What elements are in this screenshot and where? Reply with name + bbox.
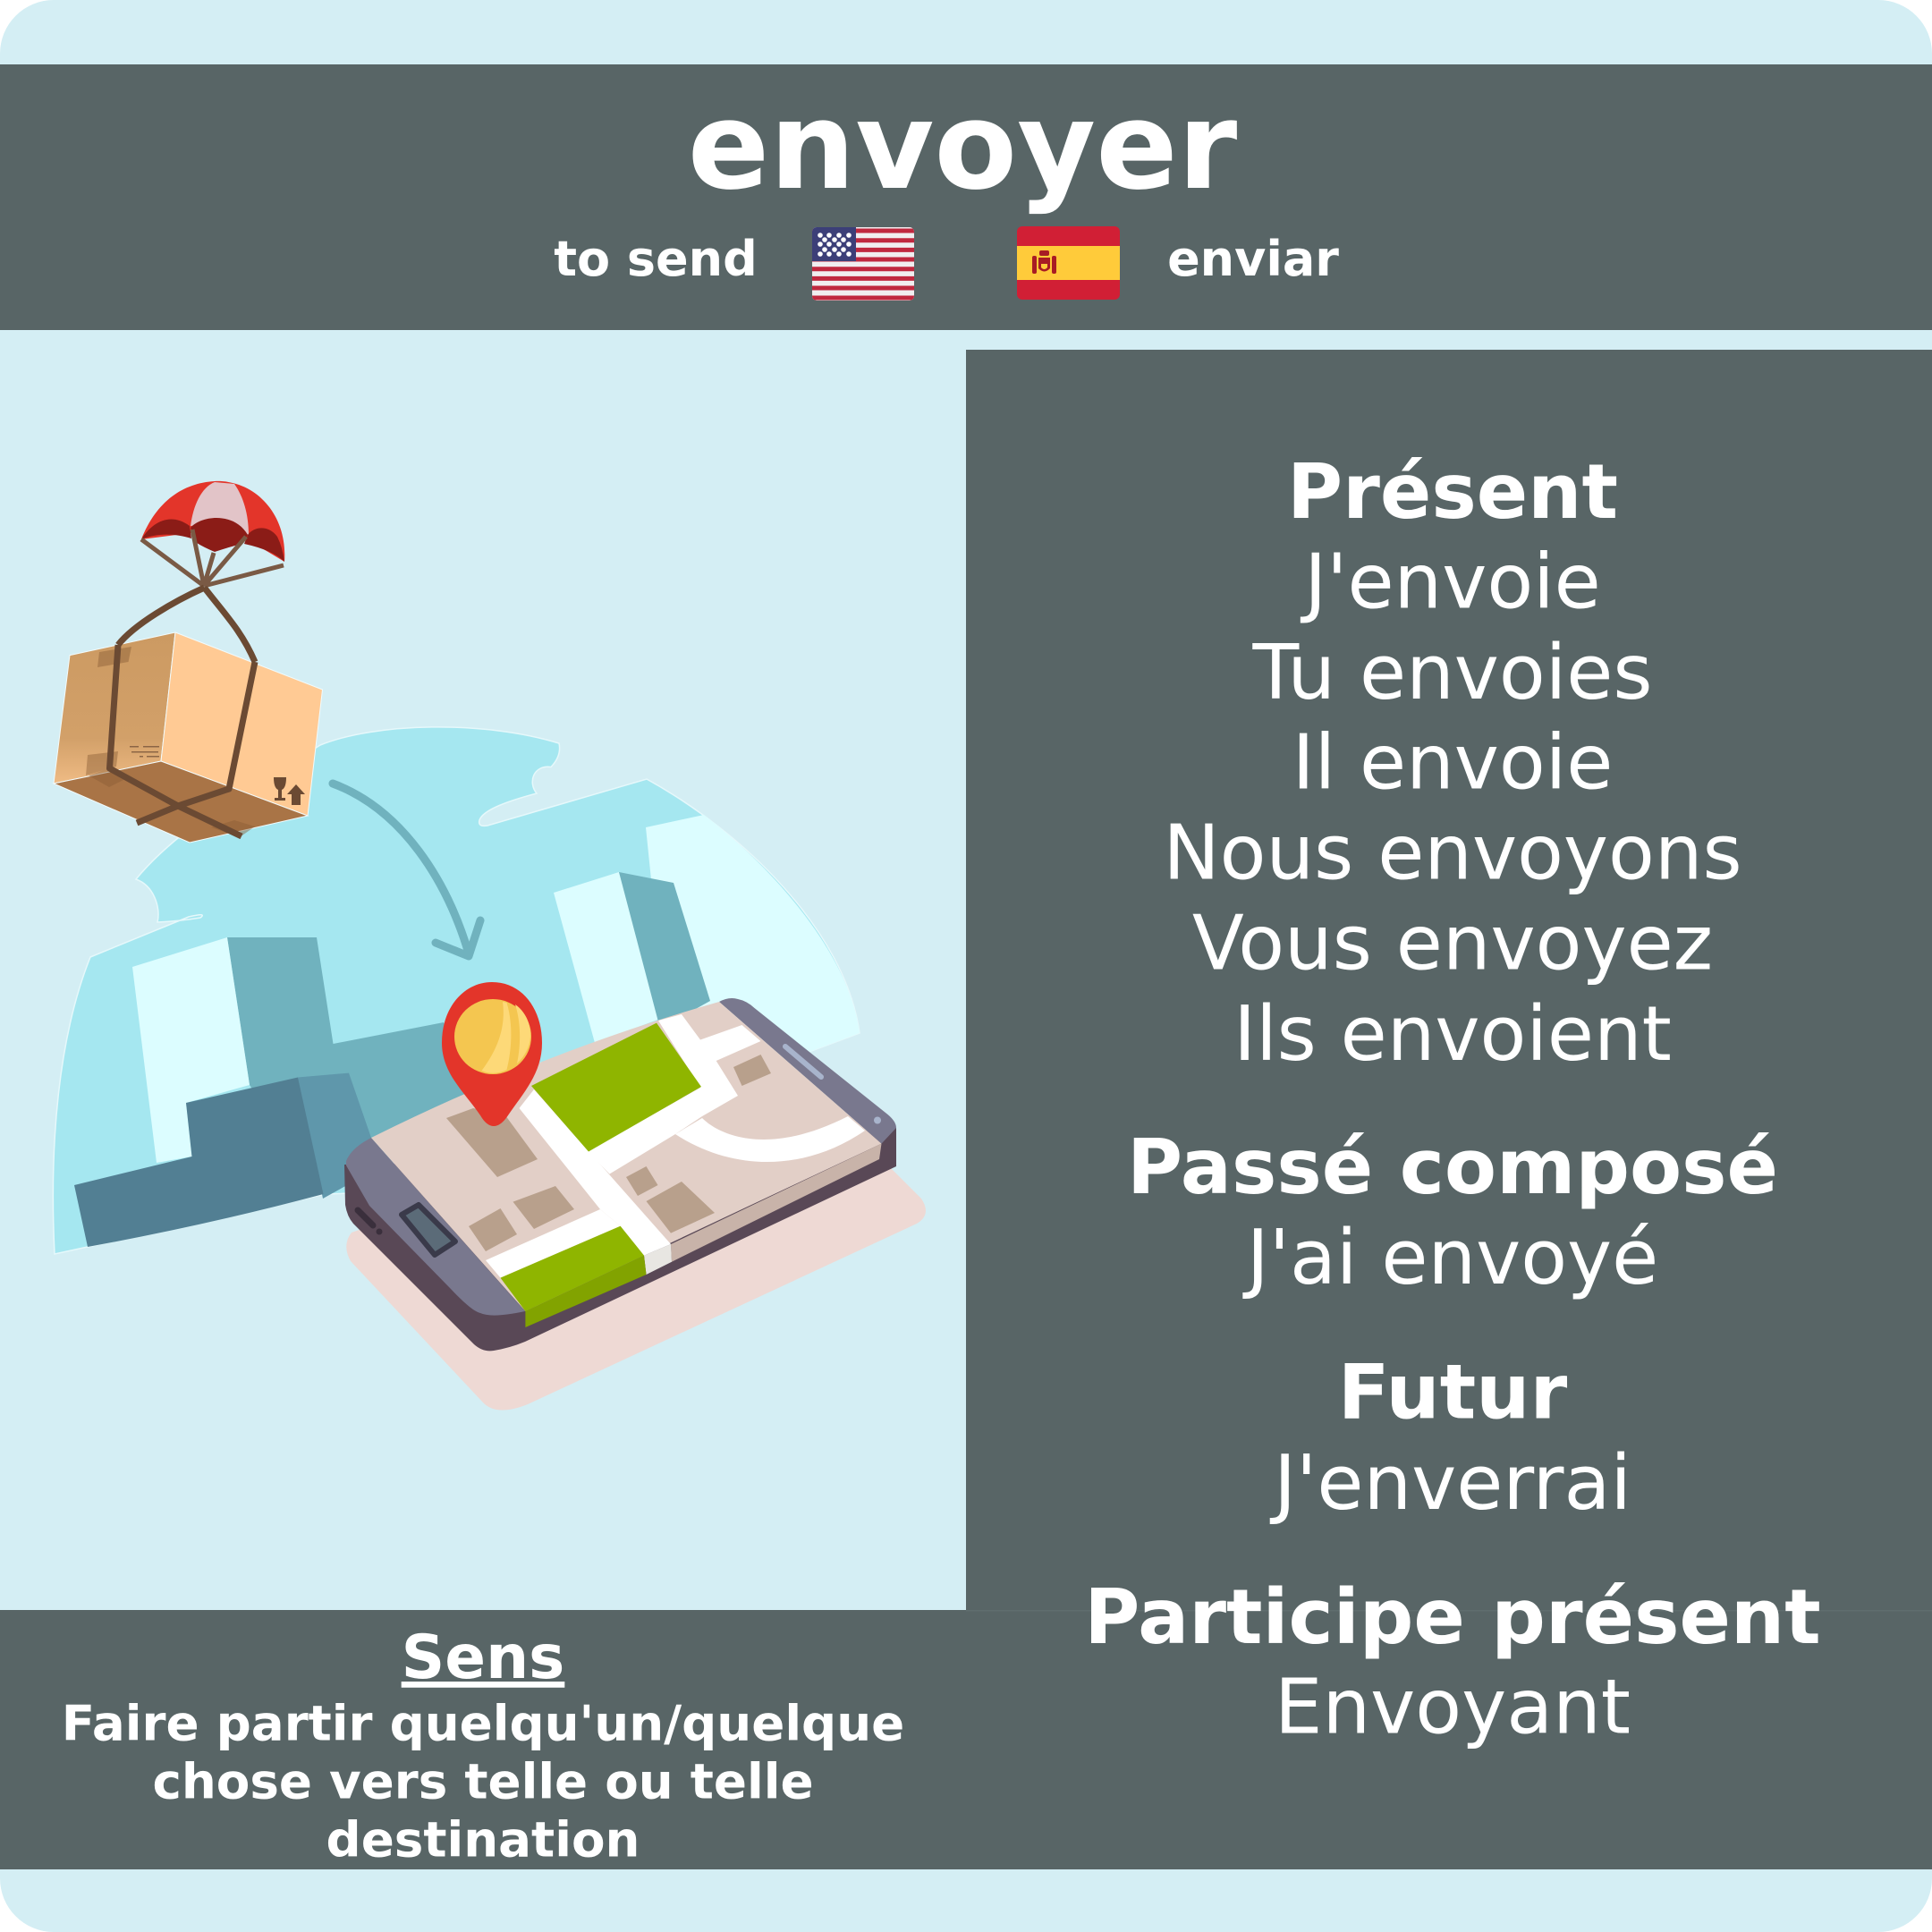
spanish translation: enviar (1167, 231, 1339, 287)
present tense: Tu envoies (1252, 628, 1652, 716)
middle building (554, 872, 710, 1043)
present tense (1163, 447, 1742, 1078)
present tense: Il envoie (1292, 717, 1613, 807)
participe present: Envoyant (1275, 1662, 1631, 1751)
meaning text: Faire partir quelqu'un/quelque (62, 1694, 904, 1751)
box markings (130, 746, 305, 805)
passe compose (1127, 1123, 1778, 1301)
header band (0, 64, 1932, 330)
arrow (333, 784, 480, 956)
box (54, 632, 322, 843)
straps (109, 588, 255, 836)
left building (132, 937, 464, 1163)
participe present: Participe présent (1084, 1572, 1821, 1661)
parcel with parachute (54, 481, 322, 843)
phone shadow (346, 1163, 926, 1411)
map roads (486, 1014, 865, 1278)
present tense: Ils envoient (1233, 989, 1672, 1078)
title: envoyer (688, 76, 1238, 216)
parachute (141, 481, 284, 586)
meaning text: chose vers telle ou telle (152, 1753, 814, 1810)
meaning heading: Sens (402, 1622, 564, 1692)
location pin (442, 982, 542, 1126)
panel: meaning (0, 1610, 966, 1869)
phone (344, 998, 896, 1351)
map parks (501, 1023, 701, 1327)
light building right (646, 815, 860, 1060)
participe present (1084, 1572, 1821, 1751)
present tense: J'envoie (1300, 537, 1601, 626)
futur (1270, 1363, 1624, 1524)
futur: Futur (1338, 1347, 1567, 1436)
present tense: Présent (1287, 447, 1618, 536)
futur: J'enverrai (1269, 1438, 1631, 1527)
sky backdrop (53, 727, 860, 1254)
present tense: Nous envoyons (1163, 809, 1742, 896)
icon: Spanish flag (1017, 226, 1120, 300)
icon: US flag (812, 227, 914, 301)
panel: conjugation (966, 350, 1932, 1869)
passe compose: Passé composé (1127, 1123, 1778, 1211)
meaning text: destination (326, 1810, 640, 1868)
meaning text (66, 1703, 902, 1857)
map blocks (446, 1055, 771, 1251)
english translation: to send (554, 231, 758, 287)
low dark building (74, 1073, 371, 1247)
phone details (358, 1046, 881, 1255)
illustration: city map delivery (53, 481, 926, 1411)
present tense: Vous envoyez (1192, 898, 1713, 987)
passe compose: J'ai envoyé (1242, 1213, 1658, 1301)
